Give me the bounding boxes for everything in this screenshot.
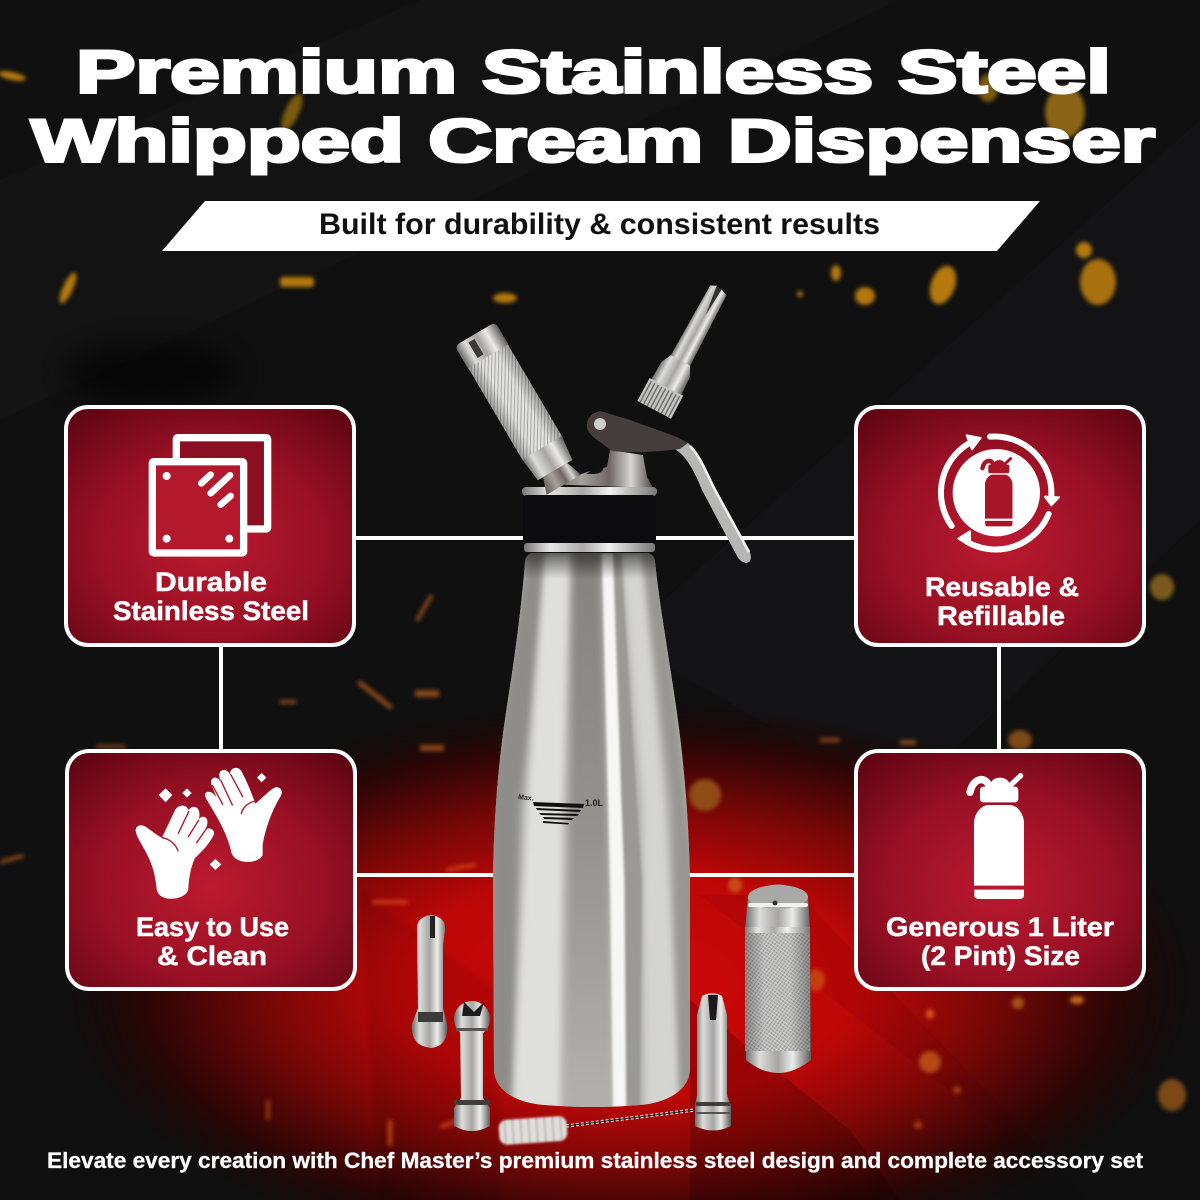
label: Generous 1 Liter [886,912,1115,942]
label: (2 Pint) Size [921,941,1080,971]
bottle body [493,553,690,1107]
fill marking: 1.0L [585,798,604,808]
accessory: tulip tip [695,993,731,1130]
fill marking: Max. [518,794,534,803]
knurled handle [455,322,584,497]
footer caption: Elevate every creation with Chef Master’s premium stainless steel design and complete accessory set [47,1148,1144,1173]
accessory: cleaning brush [498,1110,695,1145]
label [136,912,289,971]
label [925,572,1079,631]
accessory: knurled cylinder [745,884,811,1073]
label [113,567,309,626]
label: Easy to Use [136,912,289,942]
nozzle [637,278,736,419]
head with black collar [522,450,657,552]
icon: bottle [970,776,1024,899]
connector lines [219,536,1001,877]
title: Premium Stainless Steel [76,38,1111,106]
accessory: round tip [454,1001,490,1131]
panel: generous 1 liter size [856,751,1144,989]
lever [587,411,751,563]
subtitle banner [162,201,1040,251]
fill marking [518,794,604,824]
icon: clean hands with sparkles [136,768,282,899]
dispenser bottle [455,278,751,1120]
label: & Clean [157,941,267,971]
label: Durable [155,567,267,597]
icon: steel sheets [152,438,268,553]
subtitle banner: Built for durability & consistent results [319,208,880,241]
panel: easy to use and clean [67,751,355,989]
panel: reusable and refillable [856,407,1144,645]
label: Stainless Steel [113,596,309,626]
label [886,912,1115,971]
icon: refill cycle with bottle [941,435,1059,550]
label: Refillable [937,601,1065,631]
label: Reusable & [925,572,1079,602]
title [31,38,1155,174]
title: Whipped Cream Dispenser [31,108,1155,174]
panel: durable stainless steel [66,407,354,645]
accessory: star tip [412,915,447,1048]
